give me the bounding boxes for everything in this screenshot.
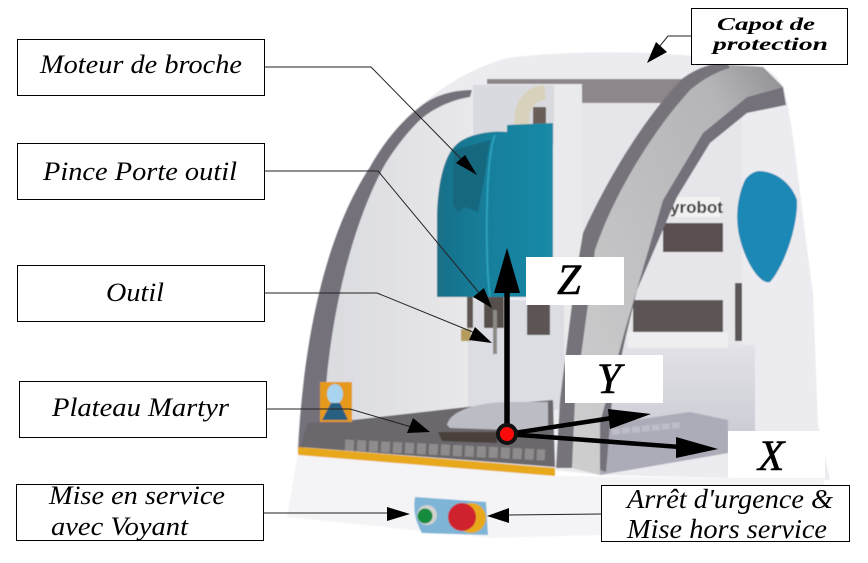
label: Pince Porte outil: Pince Porte outil bbox=[42, 157, 237, 186]
arrow: Arrêt d'urgence bbox=[487, 508, 601, 523]
label: Plateau Martyr: Plateau Martyr bbox=[51, 393, 230, 422]
axis label box: Y: Y bbox=[597, 356, 625, 403]
label: Mise en service avec Voyant bbox=[16, 481, 264, 541]
label: Mise en service avec Voyant: avec Voyant bbox=[51, 512, 189, 541]
label: Pince Porte outil bbox=[18, 144, 264, 200]
arrow: Outil bbox=[264, 293, 492, 343]
martyr plate dome bbox=[447, 402, 548, 430]
right slots bbox=[663, 223, 723, 252]
right arch right stripe bbox=[600, 87, 786, 472]
interior lower right bbox=[590, 345, 755, 475]
label: Moteur de broche: Moteur de broche bbox=[39, 50, 242, 79]
axis label box: Y bbox=[565, 355, 663, 403]
column bbox=[473, 85, 556, 145]
label: Outil: Outil bbox=[106, 278, 164, 307]
brand label: yrobot bbox=[670, 198, 723, 217]
machine photo bbox=[287, 52, 830, 538]
label: Mise en service avec Voyant: Mise en service bbox=[48, 481, 225, 510]
back panel bbox=[582, 103, 742, 353]
arrow: Mise en service bbox=[263, 507, 410, 521]
right arch speckled band bbox=[572, 65, 783, 475]
handle bbox=[737, 171, 797, 282]
origin point bbox=[498, 425, 516, 443]
protective cover shell bbox=[297, 52, 830, 480]
base bbox=[287, 452, 824, 538]
axis label box: X: X bbox=[756, 433, 786, 480]
yellow strip bbox=[298, 447, 555, 476]
label: Arrêt d'urgence et Mise hors service: Arrêt d'urgence & bbox=[625, 484, 833, 514]
left window bbox=[303, 92, 472, 440]
spindle parts bbox=[467, 296, 473, 328]
axis label box: Z bbox=[526, 257, 624, 305]
label: Capot de protection: protection bbox=[710, 34, 828, 54]
axis Y bbox=[507, 409, 651, 434]
arrow: Capot de protection bbox=[647, 36, 691, 63]
top bar bbox=[487, 79, 705, 103]
arrow: Plateau Martyr bbox=[266, 409, 430, 433]
axis Z bbox=[494, 248, 520, 434]
axis label box: Z: Z bbox=[557, 257, 582, 304]
axis label box: X bbox=[728, 431, 825, 480]
label: Arrêt d'urgence et Mise hors service: Mise hors service bbox=[626, 514, 827, 544]
sticker bbox=[320, 382, 352, 422]
label: Capot de protection bbox=[692, 8, 848, 64]
left frame arc bbox=[298, 90, 472, 450]
label: Plateau Martyr bbox=[20, 382, 266, 438]
arrow: Pince Porte outil bbox=[264, 171, 492, 308]
axis X bbox=[507, 434, 718, 458]
label: Moteur de broche bbox=[18, 40, 264, 96]
right arch left stripe bbox=[556, 62, 730, 468]
arrow: Moteur de broche bbox=[264, 67, 477, 175]
hose bbox=[522, 92, 545, 125]
motor bbox=[437, 123, 553, 297]
label: Outil bbox=[18, 266, 264, 322]
label: Capot de protection: Capot de bbox=[717, 14, 815, 34]
tray bbox=[300, 400, 555, 467]
control panel bbox=[414, 497, 488, 535]
label: Arrêt d'urgence et Mise hors service bbox=[602, 484, 850, 544]
